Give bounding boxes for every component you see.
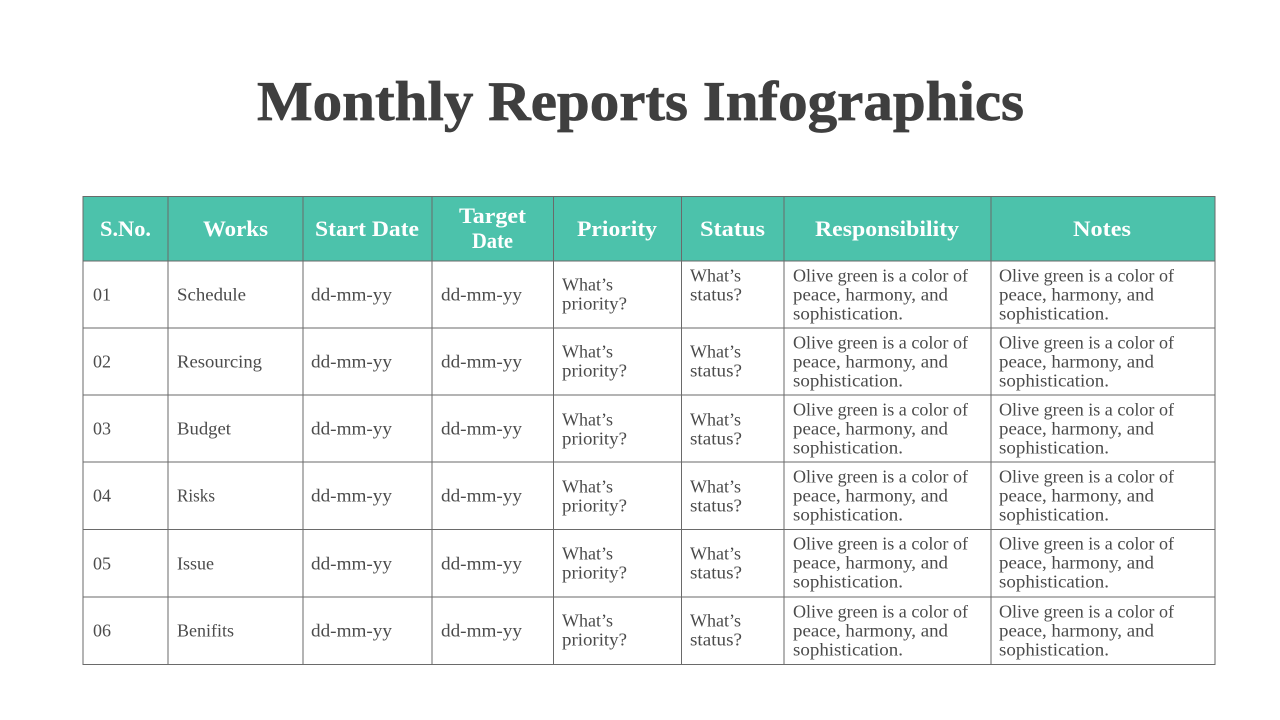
row 04: Olive green is a color of xyxy=(999,467,1174,487)
row 05: Olive green is a color of xyxy=(999,534,1174,554)
table header row: S.No. xyxy=(100,216,151,241)
row 06 xyxy=(93,602,1174,660)
row 04: dd-mm-yy xyxy=(441,486,522,506)
row 02: peace, harmony, and xyxy=(793,352,948,372)
row 06: status? xyxy=(690,630,742,650)
row 04: sophistication. xyxy=(793,505,903,525)
row 04: Olive green is a color of xyxy=(793,467,968,487)
row 03: status? xyxy=(690,429,742,449)
row 01: What’s xyxy=(562,275,613,295)
row 03: dd-mm-yy xyxy=(311,419,392,439)
row 03: dd-mm-yy xyxy=(441,419,522,439)
table header row xyxy=(83,196,1215,261)
row 04: priority? xyxy=(562,496,627,516)
row 06: peace, harmony, and xyxy=(999,621,1154,641)
row 01: dd-mm-yy xyxy=(441,285,522,305)
row 05: priority? xyxy=(562,563,627,583)
row 04: peace, harmony, and xyxy=(999,486,1154,506)
row 03: What’s xyxy=(562,410,613,430)
row 01 xyxy=(93,266,1174,324)
row 06: 06 xyxy=(93,621,111,641)
row 06: dd-mm-yy xyxy=(441,621,522,641)
row 01: peace, harmony, and xyxy=(793,285,948,305)
row 05: 05 xyxy=(93,554,111,574)
row 04: Risks xyxy=(177,486,215,506)
row 06: Olive green is a color of xyxy=(793,602,968,622)
row 05: What’s xyxy=(690,544,741,564)
row 01: priority? xyxy=(562,294,627,314)
table header row: Priority xyxy=(577,216,657,241)
row 02: dd-mm-yy xyxy=(441,352,522,372)
row 02: 02 xyxy=(93,352,111,372)
row 06: What’s xyxy=(690,611,741,631)
title: Monthly Reports Infographics xyxy=(257,71,1024,133)
row 01: dd-mm-yy xyxy=(311,285,392,305)
row 02: Olive green is a color of xyxy=(793,333,968,353)
row 04: status? xyxy=(690,496,742,516)
row 04: sophistication. xyxy=(999,505,1109,525)
row 04: dd-mm-yy xyxy=(311,486,392,506)
row 06: Benifits xyxy=(177,621,234,641)
row 03: 03 xyxy=(93,419,111,439)
row 04: 04 xyxy=(93,486,111,506)
row 03: Budget xyxy=(177,419,231,439)
row 02: What’s xyxy=(690,342,741,362)
row 02: What’s xyxy=(562,342,613,362)
table header row: Notes xyxy=(1073,216,1131,241)
row 01: Olive green is a color of xyxy=(793,266,968,286)
row 06: What’s xyxy=(562,611,613,631)
row 05: dd-mm-yy xyxy=(311,554,392,574)
row 05: status? xyxy=(690,563,742,583)
row 06: Olive green is a color of xyxy=(999,602,1174,622)
row 03: Olive green is a color of xyxy=(793,400,968,420)
row 04: What’s xyxy=(562,477,613,497)
row 01: sophistication. xyxy=(793,304,903,324)
row 03 xyxy=(93,400,1174,458)
row 02: peace, harmony, and xyxy=(999,352,1154,372)
table header row: Date xyxy=(472,228,513,253)
row 03: priority? xyxy=(562,429,627,449)
row 05: peace, harmony, and xyxy=(999,553,1154,573)
row 01: status? xyxy=(690,285,742,305)
row 02: status? xyxy=(690,361,742,381)
row 01: Olive green is a color of xyxy=(999,266,1174,286)
row 03: peace, harmony, and xyxy=(793,419,948,439)
table header row: Responsibility xyxy=(815,216,959,241)
row 05: dd-mm-yy xyxy=(441,554,522,574)
row 05: sophistication. xyxy=(793,572,903,592)
row 02: priority? xyxy=(562,361,627,381)
table header row: Start Date xyxy=(315,216,419,241)
row 04 xyxy=(93,467,1174,525)
row 05 xyxy=(93,534,1174,592)
row 03: Olive green is a color of xyxy=(999,400,1174,420)
table header row: Target xyxy=(459,203,527,228)
row 01: peace, harmony, and xyxy=(999,285,1154,305)
row 01: What’s xyxy=(690,266,741,286)
row 05: Olive green is a color of xyxy=(793,534,968,554)
table header row: Status xyxy=(700,216,765,241)
row 03: sophistication. xyxy=(793,438,903,458)
row 03: What’s xyxy=(690,410,741,430)
row 04: What’s xyxy=(690,477,741,497)
row 03: peace, harmony, and xyxy=(999,419,1154,439)
row 06: dd-mm-yy xyxy=(311,621,392,641)
row 06: priority? xyxy=(562,630,627,650)
row 01: Schedule xyxy=(177,285,246,305)
row 04: peace, harmony, and xyxy=(793,486,948,506)
row 05: peace, harmony, and xyxy=(793,553,948,573)
row 02 xyxy=(93,333,1174,391)
row 03: sophistication. xyxy=(999,438,1109,458)
table header row: Works xyxy=(203,216,268,241)
row 02: sophistication. xyxy=(999,371,1109,391)
table xyxy=(83,196,1215,665)
row 05: sophistication. xyxy=(999,572,1109,592)
row 02: Olive green is a color of xyxy=(999,333,1174,353)
row 02: sophistication. xyxy=(793,371,903,391)
row 05: Issue xyxy=(177,554,214,574)
row 05: What’s xyxy=(562,544,613,564)
row 01: 01 xyxy=(93,285,111,305)
row 06: sophistication. xyxy=(793,640,903,660)
row 06: peace, harmony, and xyxy=(793,621,948,641)
row 01: sophistication. xyxy=(999,304,1109,324)
row 02: Resourcing xyxy=(177,352,262,372)
row 02: dd-mm-yy xyxy=(311,352,392,372)
row 06: sophistication. xyxy=(999,640,1109,660)
